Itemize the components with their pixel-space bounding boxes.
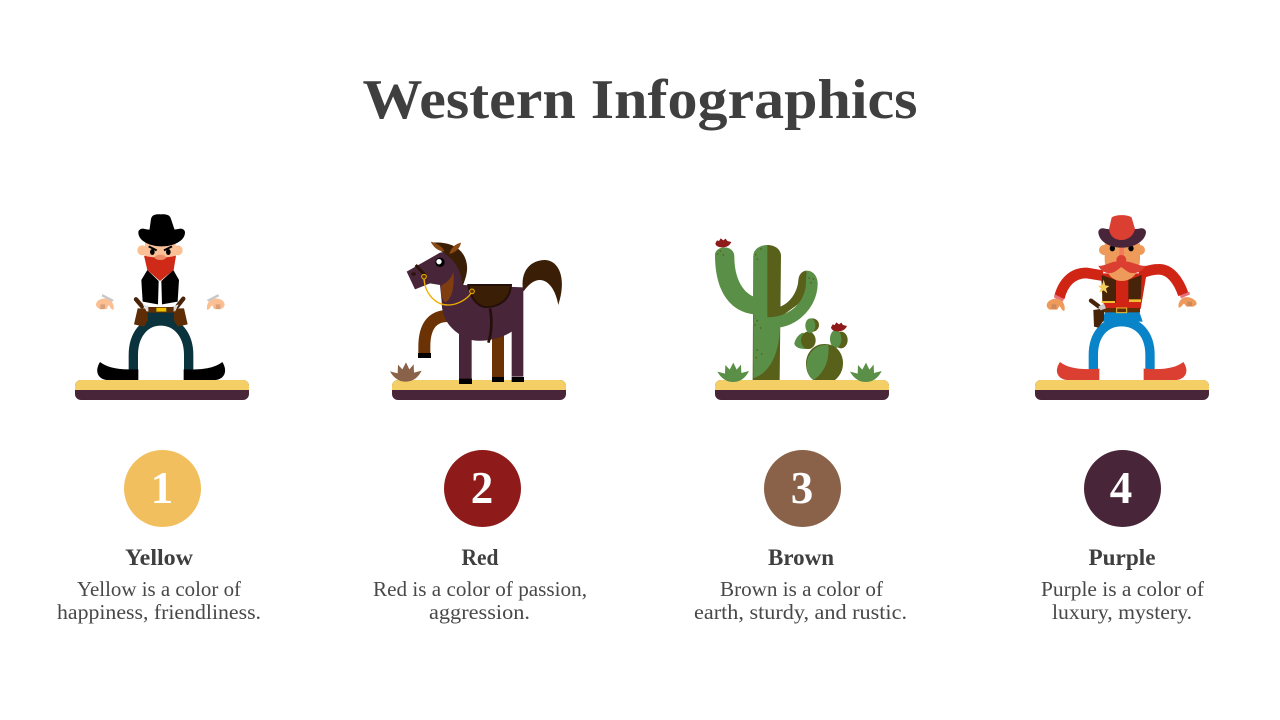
description: purple: luxury, mystery. [1052,600,1192,624]
mane and ears [433,243,467,286]
heading: purple: Purple [1088,545,1156,570]
head [137,245,147,255]
description: brown [694,577,907,624]
pants [1093,322,1150,371]
step 2 [373,450,587,624]
right arm shade [780,271,808,317]
number 3: 3 [791,463,813,513]
pants [133,321,189,371]
bandana [144,256,176,281]
tail [523,260,562,305]
badge 2 [444,450,521,527]
tumbleweed [390,362,422,382]
number 4: 4 [1110,463,1132,513]
description: brown: Brown is a color of [720,577,883,601]
description: yellow: happiness, friendliness. [57,600,261,624]
spines [717,248,814,358]
description: red: Red is a color of passion, [373,577,587,601]
description: purple [1041,577,1204,624]
holster [1093,308,1104,328]
vest [141,270,159,304]
horse body [407,252,523,379]
hat [1098,228,1146,248]
illustration: cactus [715,238,889,400]
right arm [767,271,818,327]
heading: red: Red [462,545,499,570]
description: brown: earth, sturdy, and rustic. [694,600,907,624]
boots [97,362,138,380]
trunk shade [753,245,781,380]
illustration: horse [390,242,566,400]
step 4 [1041,450,1204,624]
belt [1104,308,1140,312]
chest [441,272,454,302]
illustration: sheriff [1035,215,1209,400]
holsters and belt [134,308,148,327]
vest [1102,275,1116,303]
shirt [1101,273,1147,309]
number 1: 1 [151,463,173,513]
badge 4 [1084,450,1161,527]
step 3 [694,450,907,624]
prickly pear [794,318,848,380]
boots [1057,362,1099,380]
description: red [373,577,587,624]
illustration: bandit cowboy [75,214,249,400]
nose and mustache [1119,247,1124,258]
number 2: 2 [471,463,493,513]
hat [138,229,185,246]
description: yellow [57,577,261,624]
trunk [753,245,780,378]
arms [1059,273,1103,298]
bridle and reins [416,265,425,275]
description: yellow: Yellow is a color of [77,577,241,601]
hands [96,299,114,310]
far hind leg [492,333,504,377]
description: purple: Purple is a color of [1041,577,1204,601]
description: red: aggression. [429,600,530,624]
hands [1047,299,1065,311]
saddle [468,285,511,307]
raised leg [424,316,448,354]
badge 3 [764,450,841,527]
eye [435,258,445,267]
left arm [715,247,754,314]
star badge [1098,280,1109,293]
head [1099,245,1109,255]
title: Western Infographics [362,69,918,131]
agaves [717,363,749,382]
heading: brown: Brown [768,545,834,570]
badge 1 [124,450,201,527]
step 1 [57,450,261,624]
heading: yellow: Yellow [125,545,193,570]
